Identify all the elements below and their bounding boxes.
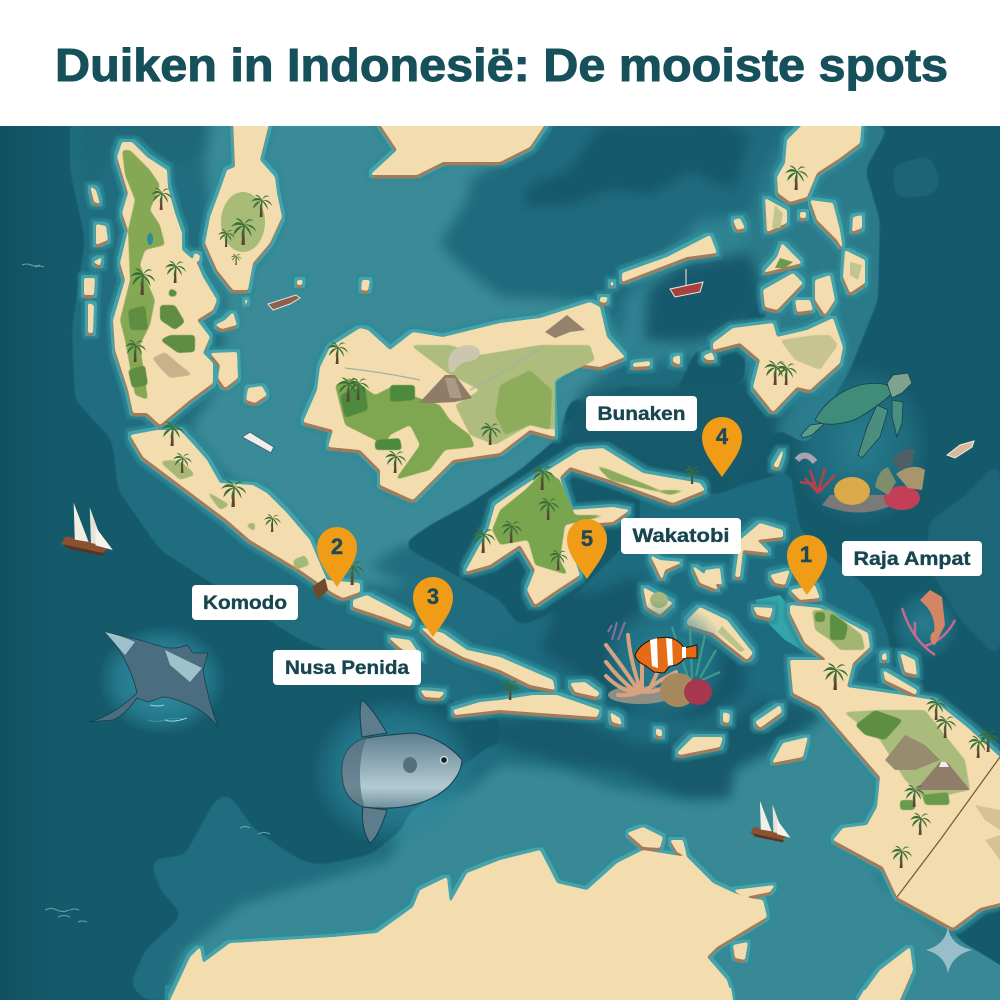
land edge patches [170, 760, 1000, 1000]
island: north Philippines [777, 120, 862, 202]
water layer: north west mid patch [80, 120, 215, 190]
terrain: Borneo river lines [345, 345, 545, 390]
reef base [608, 686, 672, 704]
vegetation and terrain [120, 150, 1000, 897]
volcano: Papua [916, 762, 970, 790]
water layer: dark sulawesi sea [560, 380, 790, 480]
pin 3: 3 [427, 584, 439, 609]
wave marks [22, 264, 270, 922]
island: Java-like long island [130, 430, 360, 598]
water layer: banda deep [540, 575, 745, 720]
lake [147, 233, 153, 245]
island: Sulawesi-like [465, 448, 705, 605]
turtle rear flipper [801, 423, 825, 438]
coral [660, 673, 696, 707]
ships [61, 269, 974, 842]
greenery: Borneo central highland [495, 370, 552, 435]
label: Komodo [192, 585, 298, 620]
title: Duiken in Indonesië: De mooiste spots [55, 39, 948, 91]
greenery: Papua south patches [900, 792, 950, 810]
island: northern peninsula [205, 120, 282, 290]
greenery: Papua forest [855, 710, 903, 740]
islands: Maluku group [643, 523, 808, 763]
pin 1: 1 [800, 542, 812, 567]
clownfish [635, 637, 697, 673]
water layer: northern deep basin [523, 120, 750, 207]
water layer: turquoise lagoon [755, 595, 840, 660]
pin 5 [567, 519, 607, 579]
island: Papua-like [790, 605, 1000, 928]
label: Nusa Penida: Nusa Penida [285, 658, 409, 679]
palm trees [125, 166, 999, 868]
body [342, 733, 462, 808]
anemone [606, 635, 676, 695]
terrain: Papua mountains [885, 735, 940, 770]
pectoral fin [403, 757, 417, 773]
sea life: turtle and coral reef [790, 363, 930, 527]
volcano snow cap [939, 762, 949, 767]
island group: central Philippines [763, 198, 865, 315]
islands: north of Australia [627, 827, 775, 960]
ship: boat east [947, 441, 974, 458]
label: Raja Ampat: Raja Ampat [854, 549, 971, 570]
water layer: banda sea shelf [460, 470, 890, 745]
map pins [317, 417, 827, 637]
island: Sumatra-like west island [113, 142, 217, 425]
volcano: eastern Borneo [545, 315, 585, 338]
label: Komodo: Komodo [203, 593, 287, 614]
greenery: Borneo dense forest [340, 385, 415, 450]
water layer: inner deep basin [645, 250, 762, 342]
greenery: Papua north forest [815, 612, 848, 640]
greenery: Java strip [160, 460, 310, 570]
fin: top [360, 700, 387, 737]
eye [440, 756, 448, 764]
terrain: eastern Papua relief [975, 805, 1000, 860]
greenery: Sulawesi [492, 470, 610, 575]
greenery: Papua highlands [843, 710, 970, 800]
pink coral [902, 608, 955, 655]
greenery: Philippines [772, 205, 862, 280]
terrain: hills on west island [152, 352, 193, 378]
turtle shell [815, 384, 893, 424]
greenery: Philippines forest [775, 258, 793, 268]
land: northern mainland [370, 120, 548, 175]
ship: sailing ship south [750, 801, 790, 842]
pin 4: 4 [716, 424, 729, 449]
border line: Papua [897, 757, 1000, 897]
water layer: shallow ring around basin [618, 215, 765, 365]
land: Australia [170, 850, 767, 1000]
greenery: Seram [718, 626, 745, 652]
turtle flippers [858, 400, 903, 458]
coral reef [797, 449, 925, 512]
islets: near Papua [770, 570, 917, 695]
ship: red boat north [670, 269, 703, 297]
location labels [192, 396, 982, 685]
label: Raja Ampat [842, 541, 982, 576]
greenery: Borneo west lush forest [335, 378, 475, 480]
greenery: Sulawesi north arm [595, 465, 690, 495]
fin: bottom [362, 807, 387, 843]
pin 1 [787, 535, 827, 595]
greenery: northern peninsula [221, 192, 265, 252]
pin 2: 2 [331, 534, 343, 559]
ship: boat north west [268, 295, 300, 310]
islands: lesser Sunda chain [353, 595, 662, 737]
greenery: west island forest patches [128, 288, 195, 388]
sea life: sunfish [311, 697, 479, 847]
greenery: Borneo east highlands [410, 345, 595, 445]
title band [0, 0, 1000, 126]
ship: shipwreck [312, 578, 328, 600]
turtle head [887, 373, 912, 398]
land: south eastern island [858, 947, 913, 1000]
island: Palawan-like strip [622, 235, 717, 282]
label: Bunaken: Bunaken [598, 404, 686, 425]
water layer: east mid patch [893, 155, 940, 198]
island: Mindanao-like [713, 318, 843, 412]
seahorse [920, 590, 945, 645]
greenery: west island [120, 150, 165, 400]
label: Nusa Penida [273, 650, 421, 685]
water layer: philippines shelf [745, 125, 890, 445]
sea plants [672, 627, 720, 680]
water layer: north central mid depth [400, 120, 850, 480]
greenery: Papua north [812, 610, 865, 650]
watermark sparkle [926, 927, 972, 973]
island: Borneo-like centre [303, 302, 625, 500]
greenery: Mindanao highlands [780, 335, 838, 370]
south shallow edge strip [165, 935, 1000, 1000]
east shelf edge strip [992, 480, 1000, 645]
body rear band [342, 738, 367, 807]
islets: north of Borneo [600, 218, 784, 468]
pin 4 [702, 417, 742, 477]
water layer: southern shallow shelf [170, 715, 1000, 1000]
sea life: seahorse with coral [891, 590, 959, 660]
water layer: central shallow sea [190, 120, 625, 585]
ship: sailing ship west [61, 503, 113, 556]
islets: western chain [84, 186, 370, 403]
label: Wakatobi: Wakatobi [632, 526, 730, 547]
volcano: Borneo [419, 345, 480, 403]
sea life: clownfish and coral [601, 600, 729, 720]
pin 2 [317, 527, 357, 587]
purple coral [608, 622, 625, 640]
pin 3 [413, 577, 453, 637]
label: Bunaken [586, 396, 697, 431]
greenery: Maluku islands [650, 592, 668, 608]
ship: cruise ship [242, 432, 274, 453]
water layer: dark southern arc [500, 700, 822, 800]
label: Wakatobi [621, 518, 741, 554]
sea life: manta ray [88, 625, 226, 735]
water layer: eastern shelf [925, 460, 1000, 660]
pin 5: 5 [581, 526, 593, 551]
